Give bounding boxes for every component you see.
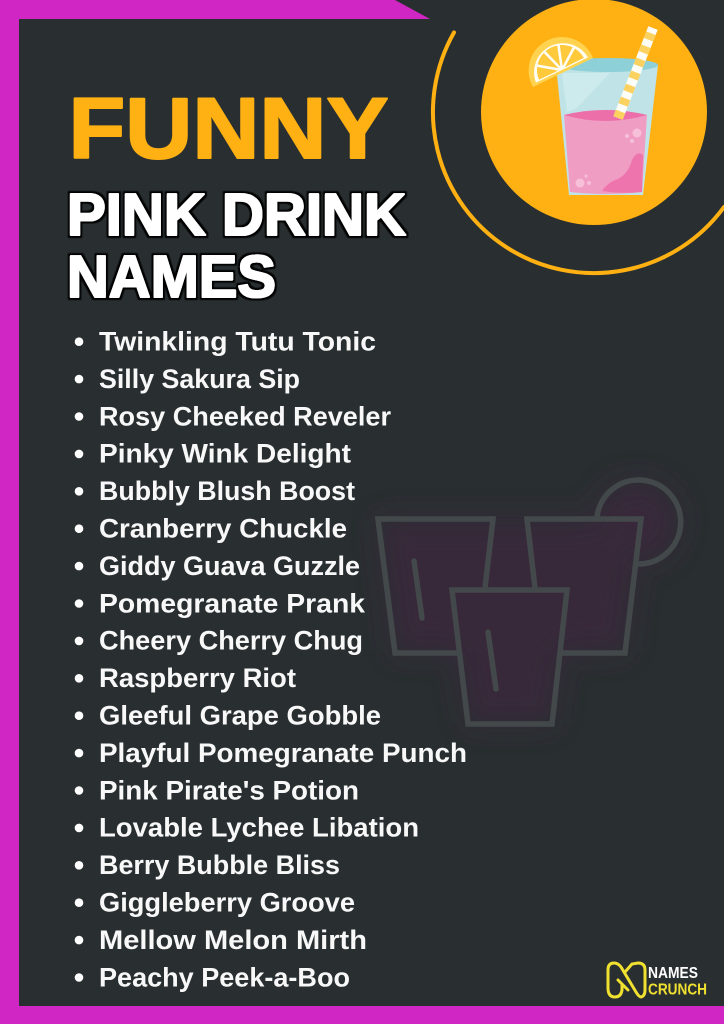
- list of drink names: Rosy Cheeked Reveler: [99, 401, 391, 431]
- list of drink names: Raspberry Riot: [99, 663, 296, 693]
- title: FUNNY: FUNNY: [68, 81, 388, 177]
- title: PINK DRINK NAMES: NAMES: [67, 244, 276, 310]
- pink liquid: [564, 110, 647, 194]
- icon: pink drink glass: [529, 28, 658, 195]
- logo mark: [608, 963, 645, 997]
- straw: [618, 28, 653, 118]
- list of drink names: Cheery Cherry Chug: [99, 626, 363, 656]
- decorative neon glasses icon: [378, 480, 681, 724]
- list of drink names: Pink Pirate's Potion: [99, 775, 359, 805]
- list of drink names: Cranberry Chuckle: [99, 514, 347, 544]
- logo text: NAMES: [648, 965, 698, 982]
- list of drink names: Lovable Lychee Libation: [99, 813, 419, 843]
- glass rim: [558, 58, 658, 72]
- orange ring arc: [433, 32, 724, 273]
- glass body: [556, 65, 658, 195]
- list of drink names: Gleeful Grape Gobble: [99, 700, 381, 730]
- list of drink names: Berry Bubble Bliss: [99, 850, 340, 880]
- list of drink names: Mellow Melon Mirth: [99, 925, 367, 955]
- title: PINK DRINK NAMES: PINK DRINK: [67, 182, 406, 248]
- logo: Names Crunch: CRUNCH: [648, 982, 707, 998]
- bubbles: [576, 128, 642, 188]
- logo: Names Crunch: [608, 963, 707, 998]
- list of drink names: Bubbly Blush Boost: [99, 476, 355, 506]
- list of drink names: Silly Sakura Sip: [99, 364, 300, 394]
- lemon slice: [529, 37, 593, 87]
- list of drink names: Peachy Peek-a-Boo: [99, 962, 350, 992]
- list of drink names: Giddy Guava Guzzle: [99, 551, 360, 581]
- list of drink names: [75, 326, 467, 992]
- list of drink names: Pinky Wink Delight: [99, 439, 351, 469]
- list of drink names: Pomegranate Prank: [99, 588, 366, 618]
- list of drink names: Playful Pomegranate Punch: [99, 738, 467, 768]
- orange circle: [481, 0, 707, 225]
- list of drink names: Twinkling Tutu Tonic: [99, 326, 376, 356]
- list of drink names: Giggleberry Groove: [99, 888, 355, 918]
- title: PINK DRINK NAMES: [67, 182, 406, 310]
